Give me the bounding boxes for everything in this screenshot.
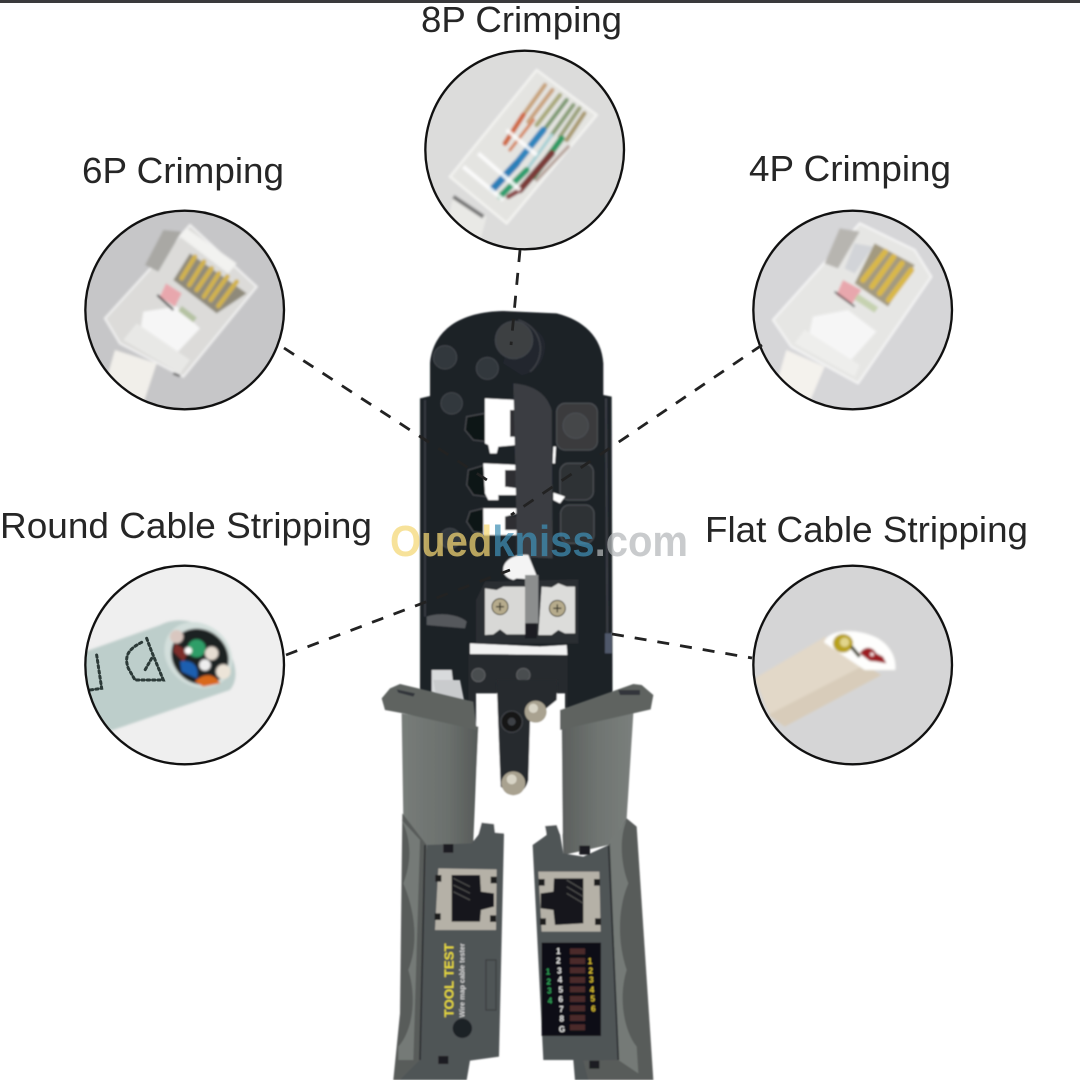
right RJ45 port — [538, 872, 601, 932]
LED panel: 8 — [559, 1015, 564, 1024]
steel highlight — [433, 680, 465, 705]
center gap — [476, 693, 565, 833]
tester label: TOOL TEST — [441, 943, 456, 1017]
LED panel — [542, 943, 601, 1036]
photo: 8P connector — [420, 47, 630, 253]
panel: round cable stripping — [0, 505, 372, 768]
photo: flat cable — [748, 562, 958, 768]
crimp dies — [557, 403, 597, 543]
circle outline — [753, 211, 952, 409]
panel: 6P crimping — [80, 150, 290, 413]
LED panel: 2 — [588, 966, 593, 975]
heading: Round Cable Stripping: Round Cable Stripping — [0, 505, 372, 546]
LED panel: 2 — [546, 977, 551, 986]
circle outline — [425, 51, 624, 249]
panel: 8P crimping — [420, 0, 630, 253]
LED panel: 1 — [556, 947, 561, 956]
photo: 6P connector — [80, 207, 290, 413]
LED panel: 6 — [591, 1004, 596, 1013]
LED panel: 5 — [558, 986, 563, 995]
crimping tool — [382, 311, 653, 1080]
LED panel: 4 — [548, 996, 553, 1005]
photo: 4P connector — [748, 207, 958, 413]
LED panel: 4 — [590, 986, 595, 995]
LED panel: 1 — [588, 957, 593, 966]
rivets — [433, 321, 533, 548]
photo: round cable — [80, 562, 290, 768]
heading: 8P Crimping: 8P Crimping — [421, 0, 622, 40]
crimp cavities — [465, 413, 487, 533]
LED panel: 7 — [559, 1005, 564, 1014]
LED panel: 2 — [556, 956, 561, 965]
LED panel: G — [559, 1025, 565, 1034]
LED panel: 3 — [557, 966, 562, 975]
heading: 6P Crimping: 6P Crimping — [82, 150, 284, 191]
watermark: Ouedkniss.com: Ouedkniss.com — [390, 517, 688, 566]
LED panel: 6 — [558, 995, 563, 1004]
LED panel: 3 — [589, 976, 594, 985]
circle outline — [85, 211, 284, 409]
LED panel: 4 — [558, 976, 563, 985]
tester label: Wire map cable tester — [457, 943, 466, 1017]
left RJ45 port — [435, 868, 497, 930]
circle outline — [753, 566, 952, 764]
tool head — [420, 311, 613, 735]
tester label — [441, 943, 496, 1038]
heading: 4P Crimping: 4P Crimping — [749, 148, 951, 189]
stripper blades — [503, 555, 538, 580]
panel: flat cable stripping — [705, 509, 1028, 768]
handles and tester modules — [382, 680, 653, 1080]
LED panel: 5 — [590, 995, 595, 1004]
slider plate — [513, 383, 553, 558]
pivot arm — [497, 680, 557, 795]
circle outline — [85, 566, 284, 764]
right handle — [533, 684, 653, 1080]
lower plate — [470, 643, 567, 655]
heading: Flat Cable Stripping: Flat Cable Stripping — [705, 509, 1028, 550]
left handle — [382, 684, 504, 1080]
dashed leader lines — [284, 250, 762, 658]
LED panel: 1 — [546, 968, 551, 977]
panel: 4P crimping — [748, 148, 958, 413]
LED panel: 3 — [547, 987, 552, 996]
steel highlights — [427, 614, 467, 628]
